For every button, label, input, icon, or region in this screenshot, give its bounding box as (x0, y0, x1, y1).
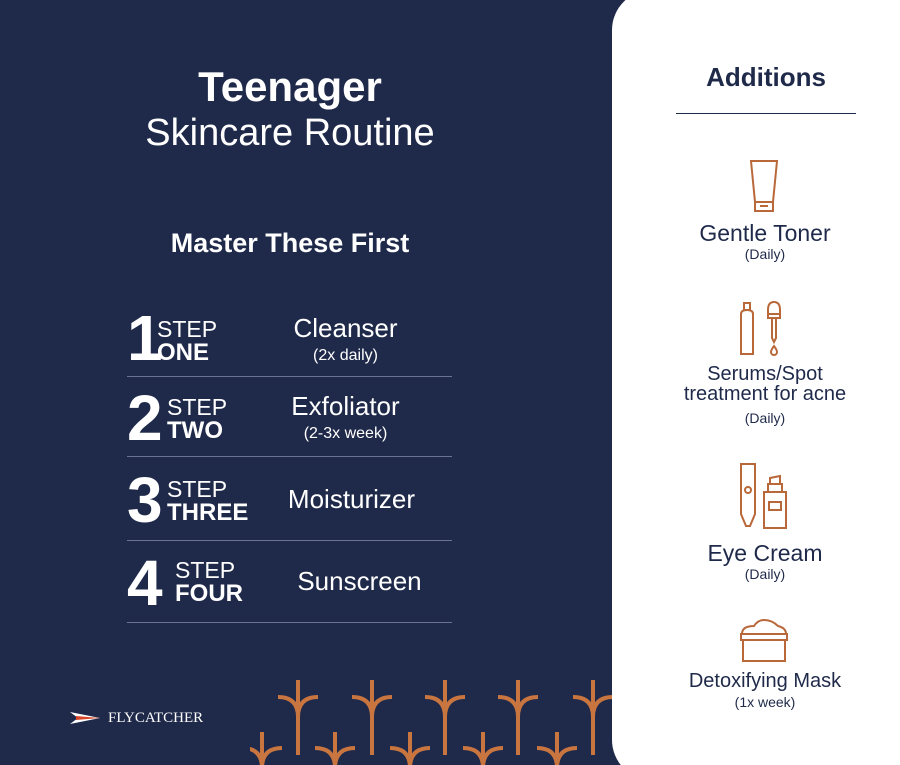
eye cream: (Daily) (745, 566, 785, 582)
title (145, 63, 435, 154)
step 2: TWO (167, 417, 223, 444)
detoxifying mask: Detoxifying Mask (689, 670, 841, 692)
icon: toner tube (750, 160, 778, 212)
detoxifying mask: (1x week) (735, 694, 795, 710)
step 1: Cleanser (293, 313, 398, 343)
title: Teenager (198, 63, 382, 110)
step 2 (127, 376, 452, 457)
step 4: STEP (175, 557, 235, 583)
additions heading: Additions (706, 62, 826, 92)
step 4: Sunscreen (297, 566, 422, 596)
step 1: (2x daily) (313, 347, 378, 364)
step 2: 2 (127, 382, 163, 454)
step 4: FOUR (175, 580, 243, 607)
serums: Serums/Spot treatment for acne (684, 363, 846, 405)
additions heading (676, 62, 856, 114)
panel: additions (612, 0, 900, 765)
step 2: (2-3x week) (304, 425, 387, 442)
gentle toner: Gentle Toner (699, 220, 831, 246)
step 1 (127, 296, 452, 377)
eye cream (707, 540, 823, 582)
step 1: 1 (127, 302, 159, 374)
step 3: 3 (127, 464, 163, 536)
step 3: STEP (167, 476, 227, 502)
title: Skincare Routine (145, 112, 435, 154)
step 1: STEP (157, 316, 217, 342)
detoxifying mask (689, 670, 842, 710)
step 2: STEP (167, 394, 227, 420)
step 4 (127, 541, 452, 623)
eye cream: Eye Cream (707, 540, 823, 566)
step 3 (127, 456, 452, 541)
gentle toner (699, 220, 831, 262)
serums (684, 363, 846, 426)
serums: (Daily) (745, 410, 785, 426)
step 2: Exfoliator (291, 391, 400, 421)
heading: master these first: Master These First (171, 228, 409, 258)
step 3: Moisturizer (288, 484, 415, 514)
icon: mask jar (740, 619, 788, 662)
gentle toner: (Daily) (745, 246, 785, 262)
decorative pattern (250, 680, 612, 765)
logo: FLYCATCHER (108, 710, 203, 726)
step 3: THREE (167, 499, 248, 526)
step 4: 4 (127, 547, 163, 619)
icon: serum bottles (740, 301, 781, 356)
step 1: ONE (157, 339, 209, 366)
icon: eye cream (740, 463, 787, 529)
